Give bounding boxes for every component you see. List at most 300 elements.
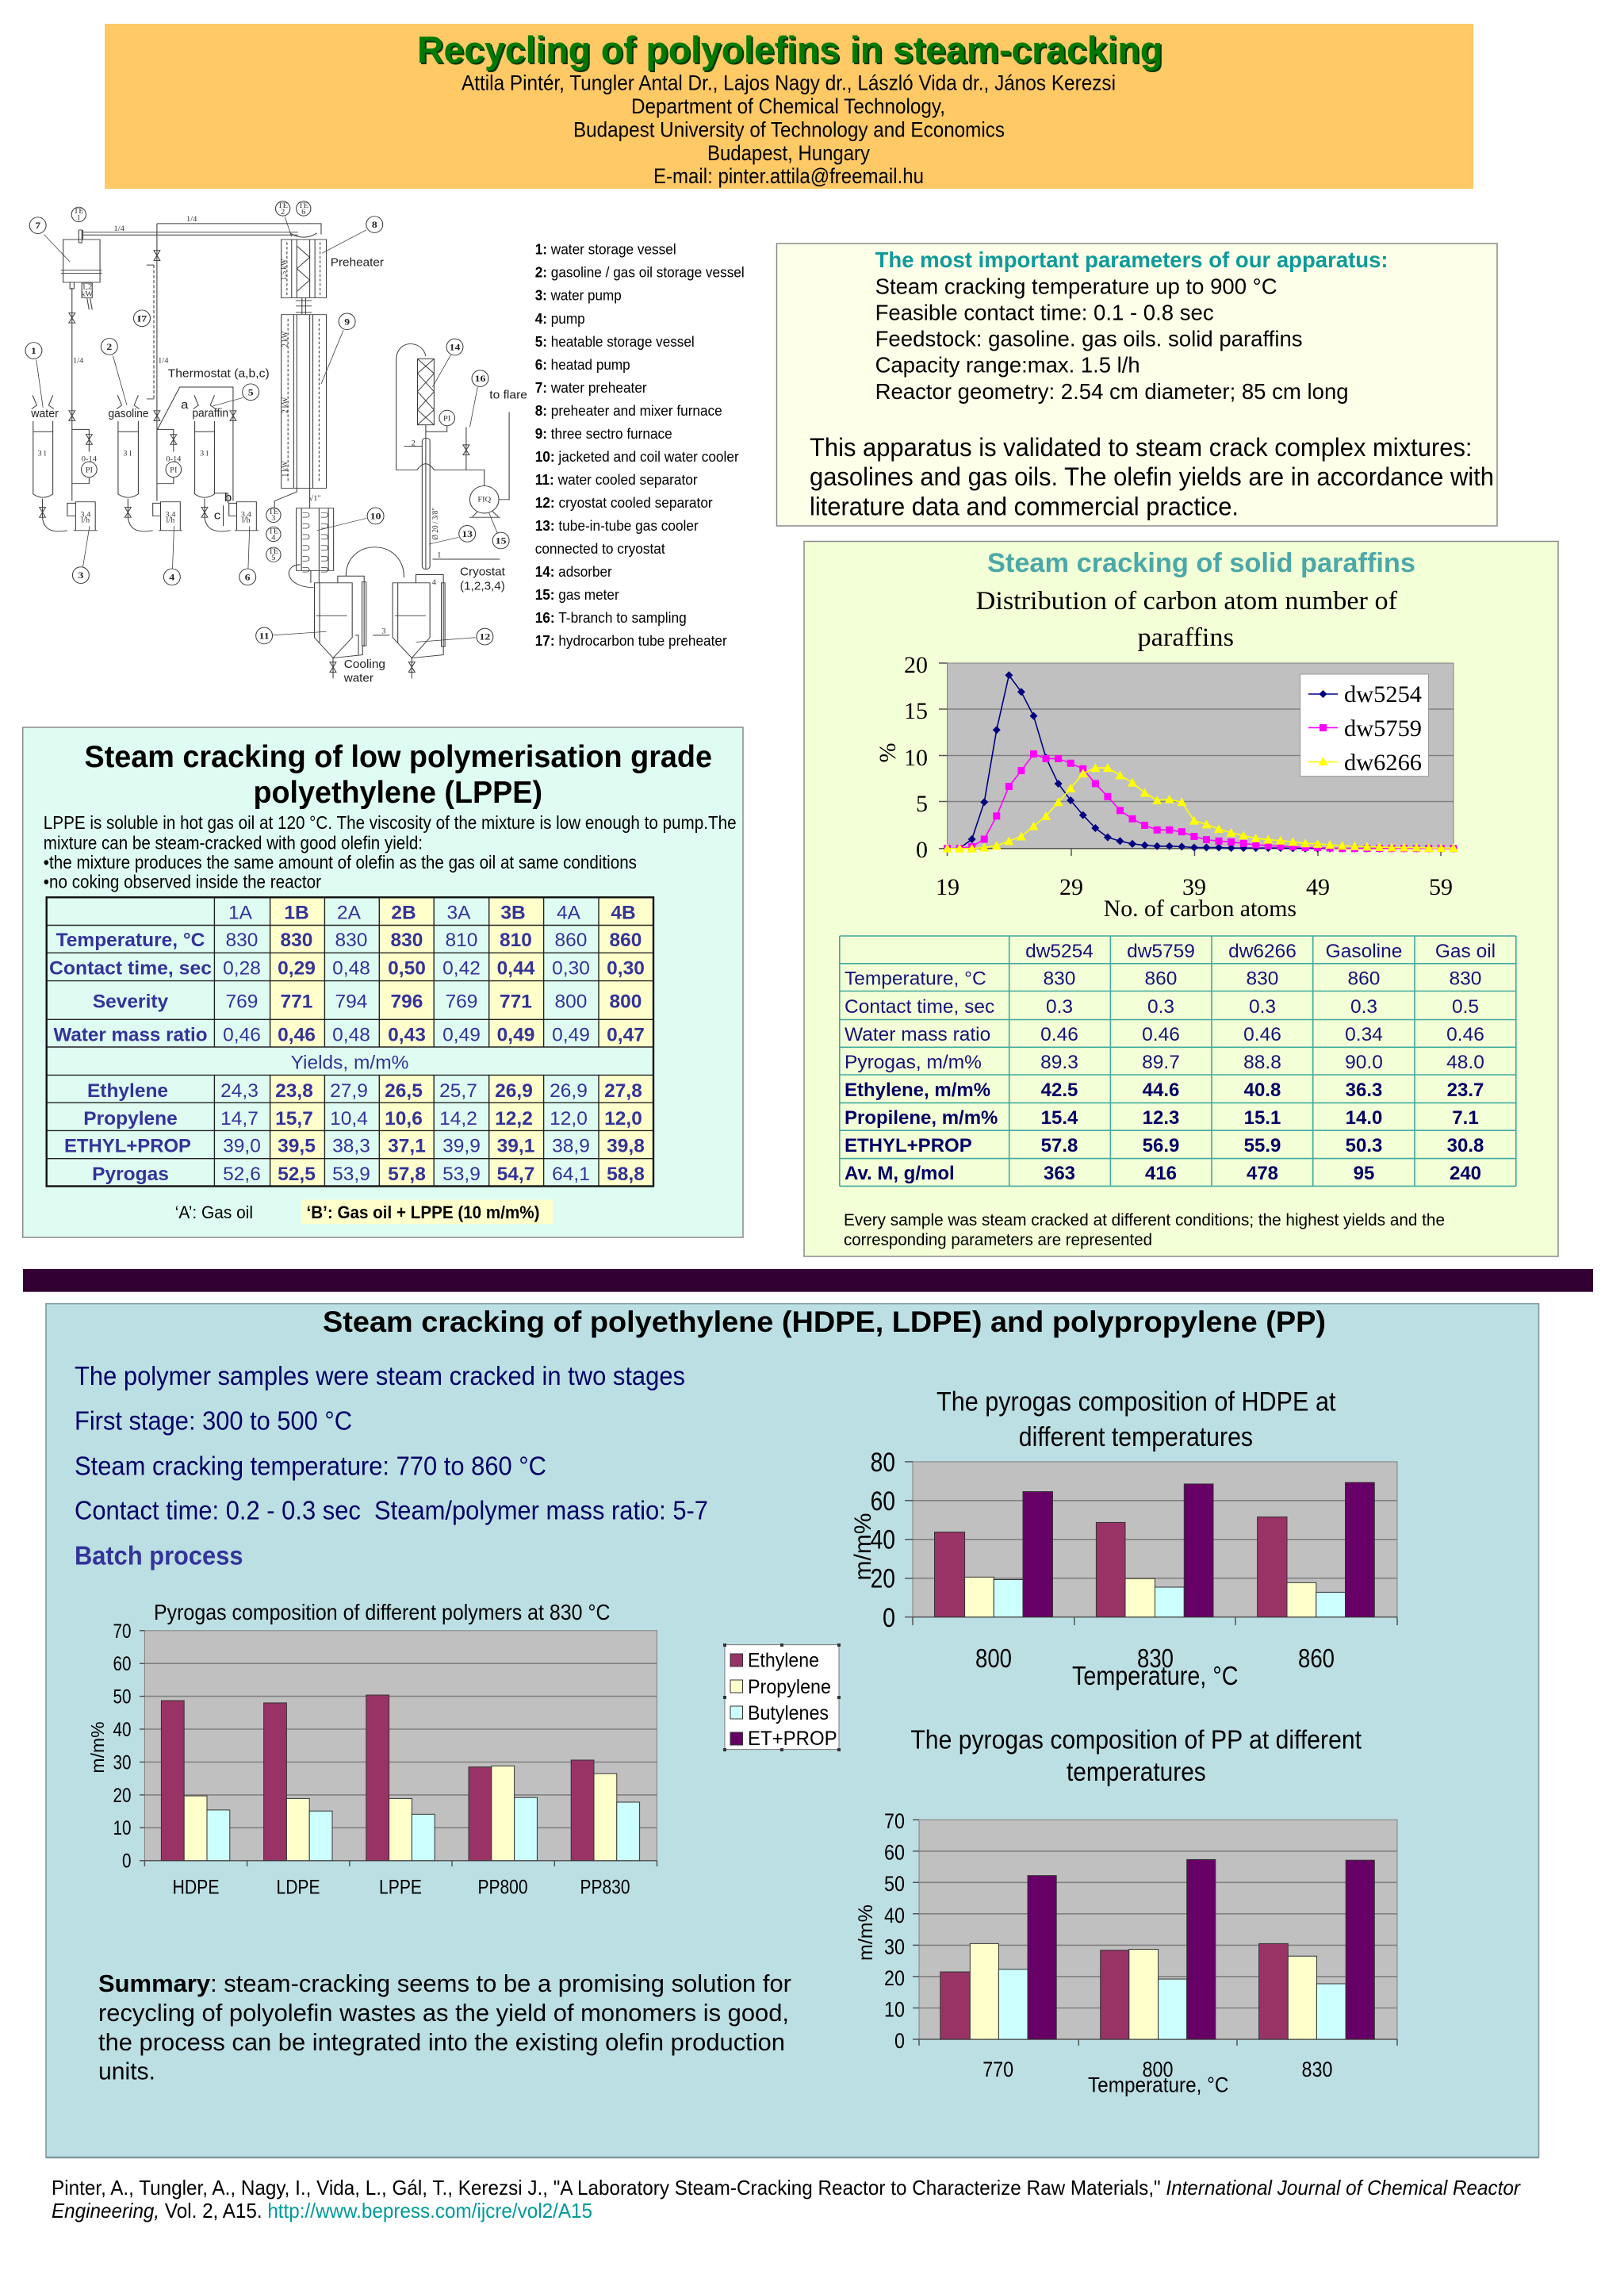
table: LPPE results: 0,46: [223, 1025, 261, 1045]
table: paraffin results: 89.3: [1040, 1052, 1078, 1073]
apparatus parts legend: 1: water storage vessel: [535, 241, 676, 257]
apparatus process flow diagram: water: [343, 672, 374, 685]
chart legend: [1300, 674, 1429, 777]
table: paraffin results: [840, 936, 1516, 1186]
apparatus process flow diagram: Preheater: [331, 256, 385, 269]
apparatus process flow diagram: 16: [475, 373, 486, 384]
table: LPPE results: 27,8: [604, 1080, 642, 1102]
apparatus process flow diagram: PI: [170, 466, 177, 474]
table: paraffin results: 7.1: [1452, 1107, 1479, 1129]
apparatus process flow diagram: l/h: [81, 516, 90, 524]
footnote: paraffin table: Every sample was steam cracked at different conditions; the highest yields and the: [844, 1210, 1445, 1229]
title: Recycling of polyolefins in steam-cracking: [417, 29, 1162, 71]
adsorber: [396, 344, 485, 486]
apparatus process flow diagram: TE: [298, 201, 308, 210]
apparatus process flow diagram: 11: [259, 630, 270, 641]
three sector furnace: [274, 315, 327, 508]
table: LPPE results: Propylene: [83, 1108, 178, 1129]
gas cooler tube: [422, 438, 430, 570]
bar chart: PP at different temperatures: 30: [884, 1935, 905, 1959]
table: LPPE results: 0,30: [552, 958, 590, 979]
apparatus process flow diagram: Cooling: [344, 658, 385, 671]
shared chart legend: Propylene: [748, 1676, 831, 1698]
apparatus process flow diagram: 6: [301, 208, 305, 217]
table: paraffin results: 830: [1247, 968, 1278, 990]
apparatus parts legend: 15: gas meter: [535, 586, 619, 603]
table: paraffin results: 860: [1348, 968, 1380, 990]
table: paraffin results: 0.46: [1243, 1024, 1281, 1045]
LPPE description: •no coking observed inside the reactor: [44, 872, 321, 892]
table: LPPE results: 54,7: [497, 1164, 534, 1185]
table: LPPE results: 0,47: [607, 1025, 645, 1045]
footnote: paraffin table: corresponding parameters are represented: [844, 1230, 1152, 1249]
apparatus parts legend: 16: T-branch to sampling: [535, 609, 687, 626]
table: LPPE results: 52,6: [223, 1164, 261, 1185]
table: LPPE results: Temperature, °C: [56, 930, 205, 951]
table: paraffin results: 830: [1450, 968, 1481, 990]
table: paraffin results: 30.8: [1447, 1135, 1484, 1156]
authors and affiliation: E-mail: pinter.attila@freemail.hu: [653, 164, 924, 188]
validation statement: gasolines and gas oils. The olefin yields are in accordance with: [810, 462, 1494, 491]
apparatus process flow diagram: 3 l: [123, 450, 132, 458]
table: paraffin results: 0.3: [1147, 996, 1174, 1018]
table: paraffin results: 48.0: [1446, 1052, 1484, 1073]
apparatus parts legend: 3: water pump: [535, 287, 622, 304]
apparatus process flow diagram: 0-14: [166, 455, 181, 463]
line chart: carbon number distribution: 20: [904, 652, 928, 678]
validation statement: literature data and commercial practice.: [810, 492, 1239, 520]
chart legend: dw5759: [1344, 715, 1422, 742]
table: LPPE results: 860: [555, 930, 587, 951]
apparatus process flow diagram: 7: [35, 220, 41, 231]
apparatus process flow diagram: 3,4: [80, 511, 90, 519]
table: LPPE results: 39,8: [607, 1136, 645, 1156]
bar chart: PP at different temperatures: The pyrogas composition of PP at different: [910, 1725, 1362, 1755]
table: LPPE results: 14,7: [220, 1108, 259, 1129]
parameter list: Capacity range:max. 1.5 l/h: [875, 353, 1140, 378]
hydrocarbon tube preheater dashed: [153, 265, 155, 399]
process conditions: Steam cracking temperature: 770 to 860 °C: [75, 1452, 546, 1480]
water cooler: [297, 508, 334, 583]
parameter list: [875, 274, 1349, 404]
bar chart: polymers at 830 °C: 70: [113, 1620, 132, 1643]
instrument bubbles: [71, 207, 86, 222]
apparatus process flow diagram: 15: [496, 535, 506, 546]
parameter list: Feedstock: gasoline. gas oils. solid paraffins: [875, 327, 1303, 351]
line chart: carbon number distribution: Distribution of carbon atom number of: [976, 587, 1397, 616]
bar chart: PP at different temperatures: 0: [894, 2029, 905, 2053]
authors and affiliation: Budapest University of Technology and Economics: [573, 117, 1005, 141]
apparatus parts legend: 13: tube-in-tube gas cooler: [535, 517, 699, 534]
bar chart: HDPE at different temperatures: 40: [871, 1525, 895, 1555]
table: LPPE results: 14,2: [439, 1108, 477, 1129]
apparatus process flow diagram: b: [224, 492, 232, 504]
table: paraffin results: 0.3: [1249, 996, 1276, 1018]
table: LPPE results: 64,1: [552, 1164, 590, 1185]
table: LPPE results: ETHYL+PROP: [64, 1136, 191, 1156]
table: paraffin results: 0.34: [1345, 1024, 1383, 1045]
table: LPPE results: Yields, m/m%: [291, 1052, 408, 1074]
shared chart legend: ET+PROP: [748, 1728, 837, 1750]
table: LPPE results: 0,44: [497, 958, 535, 979]
bar chart: HDPE at different temperatures: The pyrogas composition of HDPE at: [936, 1387, 1336, 1417]
table: paraffin results: 42.5: [1041, 1080, 1078, 1101]
table: paraffin results: 0.3: [1046, 996, 1073, 1018]
bar chart: HDPE at different temperatures: m/m%: [850, 1513, 876, 1580]
gas meter and flare line: [469, 412, 509, 517]
bar chart: HDPE at different temperatures: Temperature, °C: [1072, 1661, 1239, 1690]
bar chart: PP at different temperatures: 10: [884, 1997, 905, 2021]
table: paraffin results: Ethylene, m/m%: [845, 1080, 990, 1101]
apparatus process flow diagram: 13: [462, 528, 473, 539]
apparatus parts legend: 12: cryostat cooled separator: [535, 494, 713, 511]
table: paraffin results: Contact time, sec: [845, 996, 994, 1018]
separators: [314, 547, 445, 678]
bar chart: polymers at 830 °C: [87, 1600, 657, 1899]
bar chart: polymers at 830 °C: PP830: [580, 1877, 630, 1899]
apparatus process flow diagram: FIQ: [477, 496, 491, 504]
apparatus process flow diagram: Thermostat (a,b,c): [168, 367, 270, 380]
table: LPPE results: 58,8: [607, 1164, 645, 1185]
apparatus process flow diagram: 4: [271, 534, 276, 542]
apparatus process flow diagram: 5: [271, 554, 276, 562]
table: paraffin results: Water mass ratio: [845, 1024, 990, 1045]
table: LPPE results: 0,49: [552, 1025, 590, 1045]
table: LPPE results: 0,46: [278, 1025, 316, 1045]
heading: LPPE: Steam cracking of low polymerisation grade: [84, 740, 712, 774]
apparatus process flow diagram: 3 l: [38, 450, 47, 458]
table: paraffin results: 89.7: [1142, 1052, 1180, 1073]
bar chart: HDPE at different temperatures: 20: [871, 1564, 895, 1594]
table: LPPE results: [47, 897, 653, 1187]
table: LPPE results: 860: [610, 930, 642, 951]
table: LPPE results: 810: [446, 930, 477, 951]
bar chart: polymers at 830 °C: Pyrogas composition of different polymers at 830 °C: [154, 1600, 611, 1624]
table: LPPE results: 1A: [228, 903, 253, 923]
bar chart: polymers at 830 °C: 60: [113, 1653, 132, 1675]
reference citation: Engineering, Vol. 2, A15. http://www.bepress.com/ijcre/vol2/A15: [52, 2199, 592, 2223]
apparatus process flow diagram: Cryostat: [460, 566, 505, 578]
table: LPPE results: 830: [226, 930, 258, 951]
heading: LPPE: [84, 740, 712, 810]
preheater furnace: [282, 233, 327, 314]
process conditions: Contact time: 0.2 - 0.3 sec Steam/polymer mass ratio: 5-7: [75, 1496, 708, 1525]
table: paraffin results: 830: [1044, 968, 1075, 990]
apparatus process flow diagram: TE: [74, 208, 84, 216]
line chart: carbon number distribution: 59: [1429, 874, 1453, 900]
table: LPPE results: 0,50: [388, 958, 426, 979]
table: LPPE results: Severity: [93, 991, 169, 1012]
table: LPPE results: 12,0: [604, 1108, 642, 1129]
small annotations: 1/4: [114, 225, 124, 233]
table: LPPE results: 15,7: [275, 1108, 313, 1129]
table: paraffin results: 12.3: [1143, 1107, 1179, 1129]
table: LPPE results: 771: [500, 991, 532, 1012]
panel: polyethylene and polypropylene: [46, 1304, 1538, 2157]
table: paraffin results: 57.8: [1041, 1135, 1078, 1156]
apparatus process flow diagram: 1/4: [158, 357, 169, 365]
apparatus process flow diagram: 3: [271, 515, 276, 523]
summary: the process can be integrated into the existing olefin production: [98, 2028, 785, 2056]
reference citation: Pinter, A., Tungler, A., Nagy, I., Vida, L., Gál, T., Kerezsi J., "A Laboratory Steam-Cracking Reactor to Characterize Raw Materials," International Journal of Chemical Reactor: [52, 2176, 1521, 2200]
table: LPPE results: 52,5: [278, 1164, 316, 1185]
apparatus parts legend: 8: preheater and mixer furnace: [535, 402, 722, 419]
process conditions: The polymer samples were steam cracked in two stages: [75, 1361, 685, 1390]
table: LPPE results: 2A: [337, 903, 362, 923]
line chart: carbon number distribution: 0: [916, 837, 928, 863]
table: LPPE results: 23,8: [275, 1080, 313, 1102]
apparatus process flow diagram: 1,5 kW: [280, 259, 289, 280]
validation statement: This apparatus is validated to steam crack complex mixtures:: [810, 433, 1472, 462]
apparatus parts legend: 4: pump: [535, 310, 585, 327]
apparatus process flow diagram: kW: [81, 290, 94, 299]
reference citation: [52, 2176, 1521, 2223]
apparatus process flow diagram: 2 kW: [281, 397, 290, 413]
bar chart: PP at different temperatures: Temperature, °C: [1088, 2073, 1229, 2097]
bar chart: PP at different temperatures: [855, 1725, 1397, 2097]
table: LPPE results: 0,42: [442, 958, 481, 979]
table: LPPE results: 25,7: [439, 1080, 477, 1102]
bar chart: PP at different temperatures: 20: [884, 1966, 905, 1990]
table: paraffin results: 23.7: [1447, 1080, 1484, 1101]
table: LPPE results: 800: [555, 991, 587, 1012]
table: paraffin results: 36.3: [1346, 1080, 1382, 1101]
apparatus process flow diagram: 10: [370, 510, 381, 521]
table: LPPE results: 39,1: [497, 1136, 534, 1156]
apparatus process flow diagram: (1,2,3,4): [460, 580, 505, 593]
panel: LPPE: [23, 727, 743, 1237]
table: LPPE results: 24,3: [220, 1080, 259, 1102]
table: LPPE results: 2B: [391, 903, 416, 923]
authors and affiliation: Attila Pintér, Tungler Antal Dr., Lajos Nagy dr., László Vida dr., János Kerezsi: [462, 71, 1116, 95]
table: LPPE results: 10,4: [330, 1108, 368, 1129]
apparatus process flow diagram: 1: [77, 214, 81, 222]
line chart: carbon number distribution: 19: [936, 874, 959, 900]
heading: LPPE: polyethylene (LPPE): [254, 776, 542, 810]
table: LPPE results: 3B: [500, 903, 526, 923]
table: LPPE results: 1B: [284, 903, 309, 923]
line chart: carbon number distribution: %: [875, 742, 901, 763]
bar chart: polymers at 830 °C: 50: [113, 1686, 132, 1709]
panel: apparatus parameters: [777, 244, 1497, 526]
table: LPPE results: 53,9: [332, 1164, 370, 1185]
apparatus process flow diagram: √1": [309, 494, 321, 503]
chart legend: dw6266: [1344, 750, 1422, 776]
apparatus process flow diagram: 3 l: [200, 450, 209, 458]
validation statement: [810, 433, 1494, 520]
apparatus process flow diagram: 1: [437, 551, 442, 559]
table: paraffin results: 0.3: [1350, 996, 1377, 1018]
authors and affiliation: [462, 71, 1116, 188]
apparatus process flow diagram: I7: [137, 313, 147, 324]
overhead pipes: [72, 224, 321, 501]
bar chart: PP at different temperatures: 40: [884, 1904, 905, 1927]
bar chart: polymers at 830 °C: HDPE: [173, 1877, 219, 1899]
apparatus parts legend: 10: jacketed and coil water cooler: [535, 448, 739, 465]
table key: ‘A’: Gas oil: [175, 1202, 253, 1222]
table: paraffin results: ETHYL+PROP: [845, 1135, 972, 1156]
apparatus parts legend: 14: adsorber: [535, 563, 612, 580]
bar chart: HDPE at different temperatures: 800: [975, 1643, 1012, 1673]
line chart: carbon number distribution: 5: [916, 791, 928, 817]
apparatus process flow diagram: 5: [248, 386, 254, 397]
table: LPPE results: 37,1: [388, 1136, 426, 1156]
heading: polymers: Steam cracking of polyethylene (HDPE, LDPE) and polypropylene (PP): [323, 1306, 1326, 1338]
apparatus process flow diagram: 8: [372, 219, 377, 230]
table key: ‘B’: Gas oil + LPPE (10 m/m%): [306, 1202, 539, 1222]
table: paraffin results: 50.3: [1346, 1135, 1382, 1156]
table: paraffin results: Gas oil: [1435, 941, 1496, 962]
apparatus process flow diagram: l/h: [166, 516, 174, 524]
table: LPPE results: 10,6: [385, 1108, 423, 1129]
parameter list: Reactor geometry: 2.54 cm diameter; 85 cm long: [875, 379, 1349, 404]
bar chart: HDPE at different temperatures: different temperatures: [1019, 1422, 1253, 1452]
table: LPPE results: 12,0: [550, 1108, 588, 1129]
bar chart: HDPE at different temperatures: 60: [871, 1486, 895, 1517]
table: LPPE results: 794: [335, 991, 367, 1012]
table: paraffin results: 478: [1247, 1163, 1278, 1184]
apparatus process flow diagram: to flare: [489, 389, 527, 401]
apparatus process flow diagram: 2: [412, 439, 416, 447]
bar chart: PP at different temperatures: m/m%: [855, 1904, 877, 1961]
bar chart: HDPE at different temperatures: 0: [883, 1603, 895, 1633]
header banner: [105, 24, 1473, 189]
apparatus process flow diagram: 3,4: [241, 511, 251, 519]
table: paraffin results: 0.46: [1040, 1024, 1078, 1045]
table: LPPE results: 830: [281, 930, 312, 951]
table: LPPE results: 39,5: [278, 1136, 316, 1156]
table: paraffin results: 0.5: [1452, 996, 1479, 1018]
apparatus parts legend: 17: hydrocarbon tube preheater: [535, 632, 727, 649]
apparatus process flow diagram: Ø 20 / 3/8": [431, 508, 440, 540]
bar chart: PP at different temperatures: 70: [884, 1809, 905, 1833]
table: LPPE results: 26,9: [550, 1080, 588, 1102]
table: LPPE results: 830: [391, 930, 423, 951]
table: LPPE results: 810: [500, 930, 532, 951]
table: paraffin results: 44.6: [1143, 1080, 1179, 1101]
pumps: [67, 502, 259, 531]
bar chart: HDPE at different temperatures: 830: [1137, 1643, 1174, 1673]
line chart: carbon number distribution: 10: [904, 745, 928, 771]
water preheater vessel: [61, 240, 102, 309]
bar chart: polymers at 830 °C: LPPE: [379, 1877, 422, 1899]
apparatus process flow diagram: 2: [106, 341, 112, 352]
apparatus process flow diagram: 3: [381, 627, 386, 635]
table: LPPE results: 26,5: [385, 1080, 423, 1102]
table: LPPE results: 38,9: [552, 1136, 590, 1156]
summary: [98, 1969, 791, 2085]
apparatus process flow diagram: 6: [245, 571, 251, 582]
apparatus process flow diagram: 4: [432, 579, 436, 587]
apparatus process flow diagram: [25, 201, 527, 685]
table: LPPE results: 0,49: [442, 1025, 481, 1045]
apparatus process flow diagram: 2 kW: [281, 331, 290, 347]
apparatus parts legend: connected to cryostat: [535, 540, 665, 557]
table: paraffin results: Pyrogas, m/m%: [845, 1052, 982, 1073]
apparatus process flow diagram: 3: [78, 570, 84, 581]
LPPE description: LPPE is soluble in hot gas oil at 120 °C. The viscosity of the mixture is low enough to pump.The: [44, 812, 737, 833]
table: LPPE results: Contact time, sec: [49, 958, 212, 979]
apparatus process flow diagram: TE: [269, 548, 278, 556]
bar chart: polymers at 830 °C: 10: [113, 1817, 132, 1839]
summary: units.: [98, 2058, 155, 2085]
apparatus process flow diagram: 1,2: [82, 283, 92, 291]
table: LPPE results: 3A: [447, 903, 471, 923]
table: LPPE results: 800: [610, 991, 642, 1012]
table: LPPE results: 771: [281, 991, 312, 1012]
apparatus parts legend: 2: gasoline / gas oil storage vessel: [535, 264, 745, 281]
apparatus process flow diagram: 0-14: [82, 455, 97, 463]
apparatus process flow diagram: 2: [281, 208, 285, 217]
line chart: carbon number distribution: No. of carbon atoms: [1104, 896, 1297, 922]
table: LPPE results: 57,8: [388, 1164, 426, 1185]
leader lines: [36, 217, 497, 642]
LPPE description: •the mixture produces the same amount of olefin as the gas oil at same conditions: [44, 852, 637, 873]
apparatus process flow diagram: 1/4: [186, 216, 197, 224]
apparatus process flow diagram: 3,4: [165, 511, 176, 519]
line chart: carbon number distribution: 39: [1182, 874, 1206, 900]
bar chart: polymers at 830 °C: 30: [113, 1751, 132, 1774]
table: LPPE results: 0,49: [497, 1025, 534, 1045]
apparatus process flow diagram: c: [214, 509, 220, 522]
table: paraffin results: 14.0: [1346, 1107, 1382, 1129]
apparatus process flow diagram: TE: [269, 508, 278, 516]
line chart: carbon number distribution: 15: [904, 698, 928, 724]
table: paraffin results: 55.9: [1244, 1135, 1281, 1156]
table: LPPE results: 26,9: [495, 1080, 533, 1102]
apparatus parts legend: 6: heatad pump: [535, 356, 630, 373]
table: paraffin results: Propilene, m/m%: [845, 1107, 998, 1129]
line chart: carbon number distribution: paraffins: [1137, 623, 1234, 652]
table: LPPE results: 0,29: [278, 958, 316, 979]
apparatus process flow diagram: 1 kW: [281, 461, 290, 477]
apparatus process flow diagram: 1/4: [73, 357, 83, 365]
LPPE description: mixture can be steam-cracked with good olefin yield:: [44, 833, 423, 853]
footnote: paraffin table: [844, 1210, 1445, 1249]
bar chart: HDPE at different temperatures: [850, 1387, 1397, 1690]
apparatus process flow diagram: PI: [443, 415, 450, 423]
table: LPPE results: 4B: [611, 903, 636, 923]
summary: Summary: steam-cracking seems to be a promising solution for: [98, 1969, 791, 1997]
table: paraffin results: dw6266: [1228, 941, 1297, 962]
LPPE description: [44, 812, 737, 892]
panel: solid paraffins: [804, 541, 1558, 1256]
numbered callouts: [29, 217, 46, 234]
table: LPPE results: 0,30: [607, 958, 645, 979]
apparatus process flow diagram: TE: [278, 201, 288, 210]
table: LPPE results: 12,2: [495, 1108, 533, 1129]
summary: recycling of polyolefin wastes as the yield of monomers is good,: [98, 1999, 789, 2027]
table: LPPE results: 830: [335, 930, 367, 951]
table: paraffin results: 363: [1044, 1163, 1075, 1184]
table: LPPE results: 39,0: [223, 1136, 261, 1156]
bar chart: PP at different temperatures: 800: [1142, 2058, 1174, 2081]
bar chart: PP at different temperatures: 60: [884, 1841, 905, 1865]
table: LPPE results: 796: [391, 991, 423, 1012]
table: LPPE results: 38,3: [332, 1136, 370, 1156]
shared chart legend: Butylenes: [748, 1702, 829, 1724]
bar chart: HDPE at different temperatures: 860: [1298, 1643, 1335, 1673]
table key: [175, 1199, 553, 1224]
chart legend: dw5254: [1344, 681, 1422, 708]
apparatus process flow diagram: 14: [450, 341, 461, 352]
apparatus parts legend: 7: water preheater: [535, 379, 647, 396]
authors and affiliation: Budapest, Hungary: [707, 141, 871, 165]
bar chart: polymers at 830 °C: m/m%: [87, 1721, 108, 1774]
bar chart: PP at different temperatures: 830: [1302, 2058, 1332, 2081]
table: paraffin results: 40.8: [1244, 1080, 1281, 1101]
bar chart: polymers at 830 °C: 0: [122, 1851, 132, 1873]
